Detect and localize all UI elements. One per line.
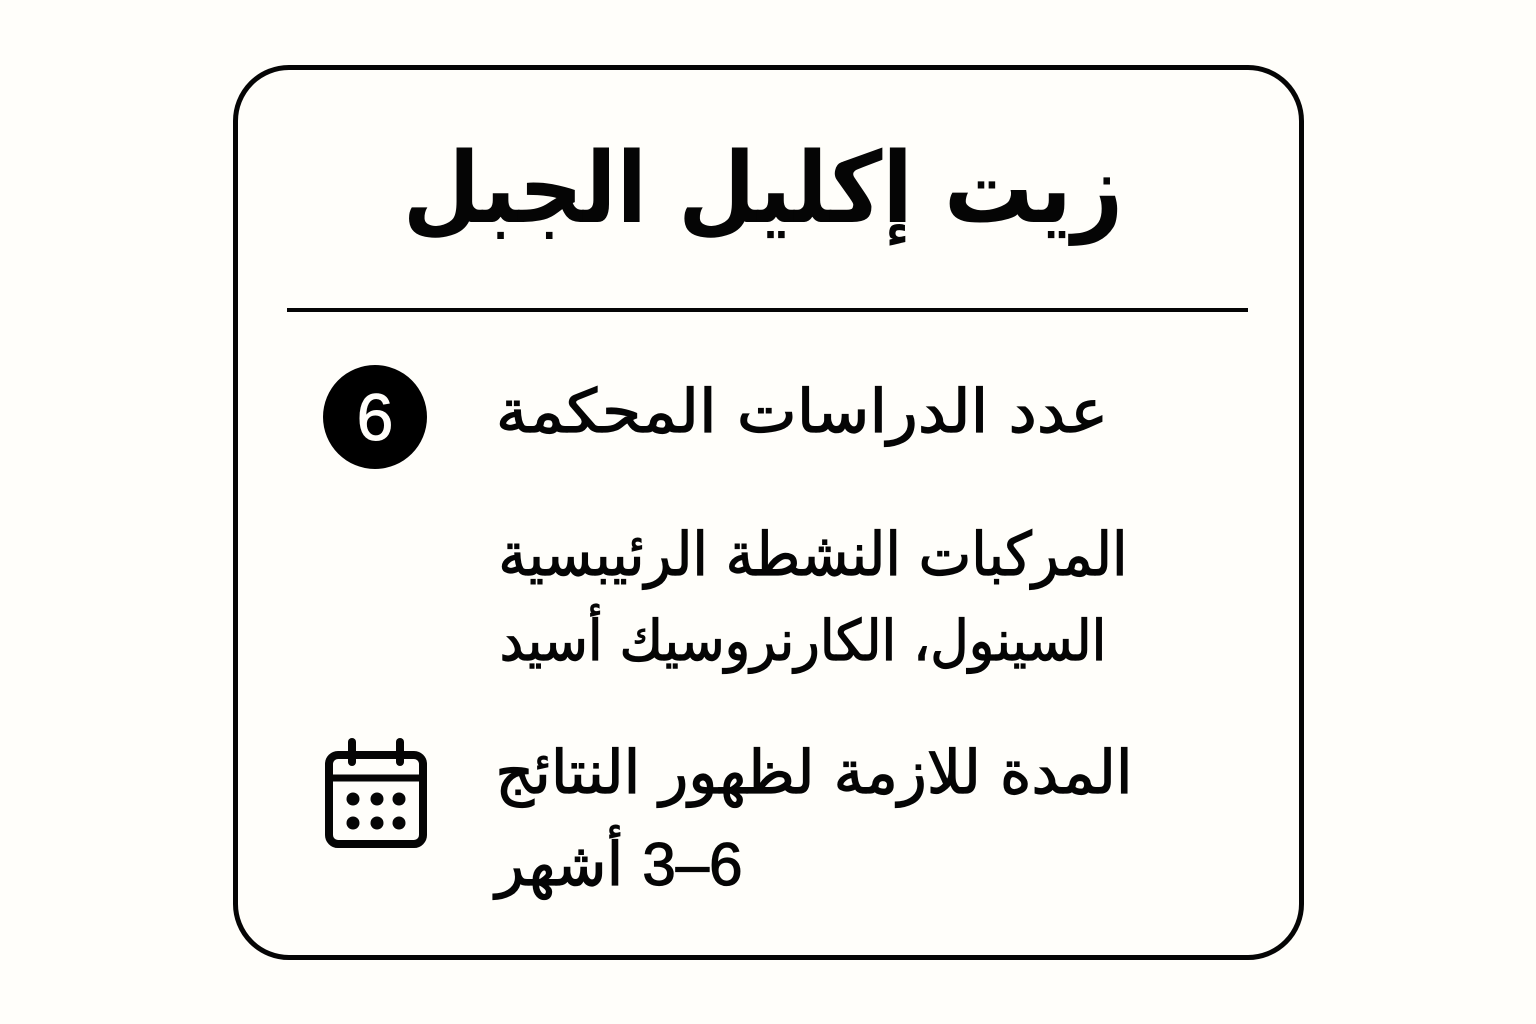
- icon: number six badge: 6: [357, 380, 393, 454]
- text: three to six months: 3–6 أشهر: [496, 830, 742, 900]
- text: main active compounds heading: المركبات النشطة الرئيبسية: [498, 520, 1128, 590]
- panel: rosemary oil card: [233, 65, 1304, 960]
- icon: number six badge: [323, 365, 427, 469]
- divider: [287, 308, 1248, 312]
- title: زيت إكليل الجبل: [403, 132, 1123, 246]
- text: time needed for results: المدة للازمة لظهور النتائج: [495, 738, 1133, 808]
- text: number of controlled studies: عدد الدراسات المحكمة: [496, 377, 1108, 447]
- icon: calendar: [325, 738, 427, 848]
- text: compounds list: السينول، الكارنروسيك أسيد: [500, 609, 1106, 674]
